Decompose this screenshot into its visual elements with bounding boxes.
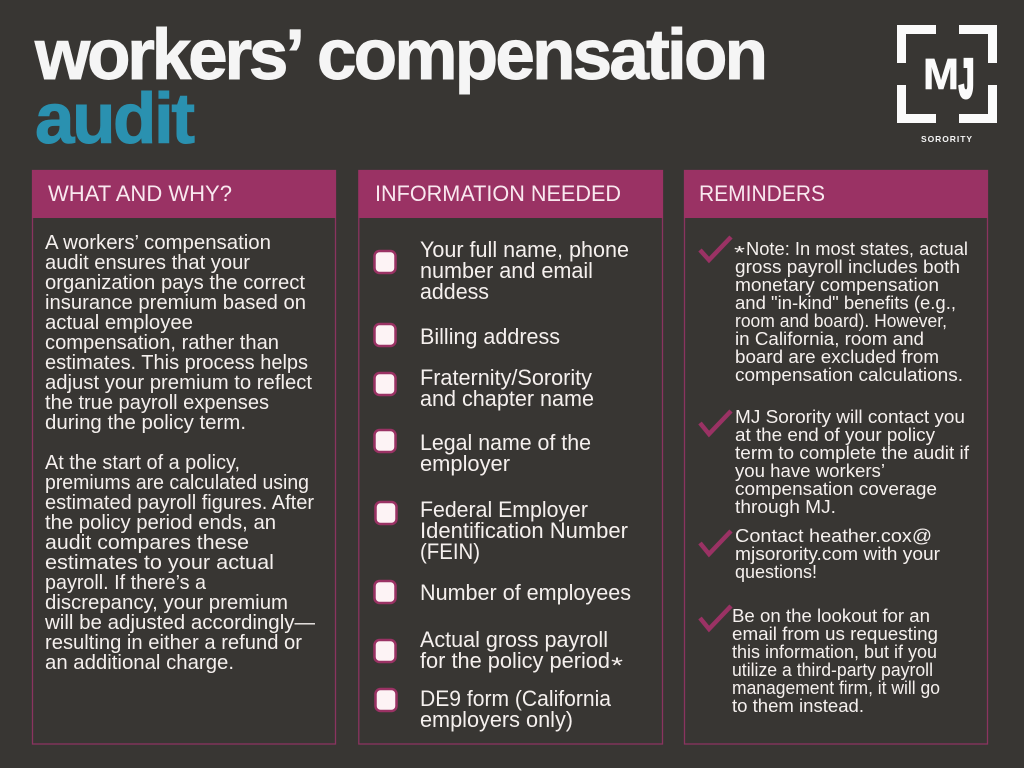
text block: reminders: monetary compensation: [735, 275, 939, 295]
checklist items: *: [611, 653, 624, 678]
checklist items: for the policy period: [420, 648, 610, 673]
text block: reminders: Note: In most states, actual: [746, 239, 968, 259]
checklist items: Fraternity/Sorority: [420, 365, 592, 390]
checklist items: and chapter name: [420, 386, 594, 411]
text block: reminders: mjsorority.com with your: [735, 544, 940, 564]
text block: reminders: questions!: [735, 562, 817, 582]
text block: reminders: to them instead.: [732, 696, 864, 716]
text block: what and why paragraphs: actual employee: [45, 312, 193, 334]
text block: what and why paragraphs: premiums are calculated using: [45, 472, 309, 494]
logo: MJ Sorority: SORORITY: [921, 134, 972, 144]
text block: reminders: board are excluded from: [735, 347, 939, 367]
checklist items: Federal Employer: [420, 497, 588, 522]
heading: what and why: WHAT AND WHY?: [48, 181, 232, 206]
checklist items: Identification Number: [420, 518, 628, 543]
checklist items: Actual gross payroll: [420, 627, 608, 652]
text block: what and why paragraphs: the policy period ends, an: [45, 512, 276, 534]
text block: what and why paragraphs: estimates to your actual: [45, 552, 274, 574]
checklist items: Your full name, phone: [420, 237, 629, 262]
text block: reminders: room and board). However,: [735, 311, 947, 331]
title: workers’: [34, 16, 305, 95]
text block: reminders: and "in-kind" benefits (e.g.,: [735, 293, 956, 313]
title: audit: [35, 80, 195, 159]
text block: what and why paragraphs: will be adjusted accordingly—: [44, 612, 315, 634]
text block: reminders: management firm, it will go: [732, 678, 940, 698]
text block: reminders: *: [734, 243, 745, 263]
checklist items: Legal name of the: [420, 430, 591, 455]
text block: reminders: term to complete the audit if: [735, 443, 970, 463]
text block: what and why paragraphs: compensation, rather than: [45, 332, 279, 354]
text block: reminders: compensation calculations.: [735, 365, 963, 385]
panel: information needed: [358, 170, 663, 744]
logo: MJ Sorority: J: [959, 49, 974, 110]
text block: what and why paragraphs: the true payroll expenses: [45, 392, 269, 414]
text block: reminders: compensation coverage: [735, 479, 937, 499]
text block: reminders: [732, 239, 970, 716]
title: compensation: [317, 16, 768, 95]
title: [34, 16, 768, 159]
checklist items: Number of employees: [420, 580, 631, 605]
checklist items: employers only): [420, 707, 573, 732]
icons: check marks: [700, 237, 731, 629]
text block: reminders: you have workers’: [735, 461, 885, 481]
heading: reminders: REMINDERS: [699, 181, 825, 206]
text block: reminders: Be on the lookout for an: [732, 606, 930, 626]
panel: reminders: [684, 170, 988, 744]
text block: reminders: utilize a third-party payroll: [732, 660, 933, 680]
text block: reminders: through MJ.: [735, 497, 836, 517]
checklist items: Billing address: [420, 324, 560, 349]
text block: what and why paragraphs: At the start of a policy,: [45, 452, 240, 474]
text block: what and why paragraphs: estimated payroll figures. After: [45, 492, 314, 514]
text block: what and why paragraphs: organization pays the correct: [45, 272, 305, 294]
text block: reminders: Contact heather.cox@: [735, 526, 932, 546]
text block: reminders: MJ Sorority will contact you: [735, 407, 965, 427]
text block: reminders: at the end of your policy: [735, 425, 935, 445]
text block: what and why paragraphs: A workers’ compensation: [45, 232, 271, 254]
logo: MJ Sorority: M: [923, 50, 959, 99]
checklist items: [420, 237, 631, 732]
text block: reminders: this information, but if you: [732, 642, 937, 662]
text block: what and why paragraphs: insurance premium based on: [45, 292, 306, 314]
checklist items: addess: [420, 279, 489, 304]
text block: what and why paragraphs: an additional charge.: [45, 652, 234, 674]
text block: what and why paragraphs: [44, 232, 315, 674]
checklist items: employer: [420, 451, 510, 476]
logo: MJ Sorority: [897, 25, 997, 144]
text block: what and why paragraphs: during the policy term.: [45, 412, 246, 434]
text block: reminders: in California, room and: [735, 329, 924, 349]
checklist items: DE9 form (California: [420, 686, 612, 711]
checklist items: (FEIN): [420, 539, 480, 564]
panel: what and why: [32, 170, 336, 744]
text block: what and why paragraphs: audit ensures that your: [45, 252, 250, 274]
icons: checkboxes: [374, 251, 396, 711]
text block: what and why paragraphs: discrepancy, your premium: [45, 592, 288, 614]
text block: what and why paragraphs: adjust your premium to reflect: [45, 372, 312, 394]
text block: what and why paragraphs: payroll. If there’s a: [45, 572, 207, 594]
heading: information needed: INFORMATION NEEDED: [375, 181, 621, 206]
text block: what and why paragraphs: estimates. This process helps: [45, 352, 308, 374]
text block: reminders: email from us requesting: [732, 624, 938, 644]
text block: what and why paragraphs: resulting in either a refund or: [45, 632, 302, 654]
text block: reminders: gross payroll includes both: [735, 257, 960, 277]
checklist items: number and email: [420, 258, 593, 283]
text block: what and why paragraphs: audit compares these: [45, 532, 249, 554]
